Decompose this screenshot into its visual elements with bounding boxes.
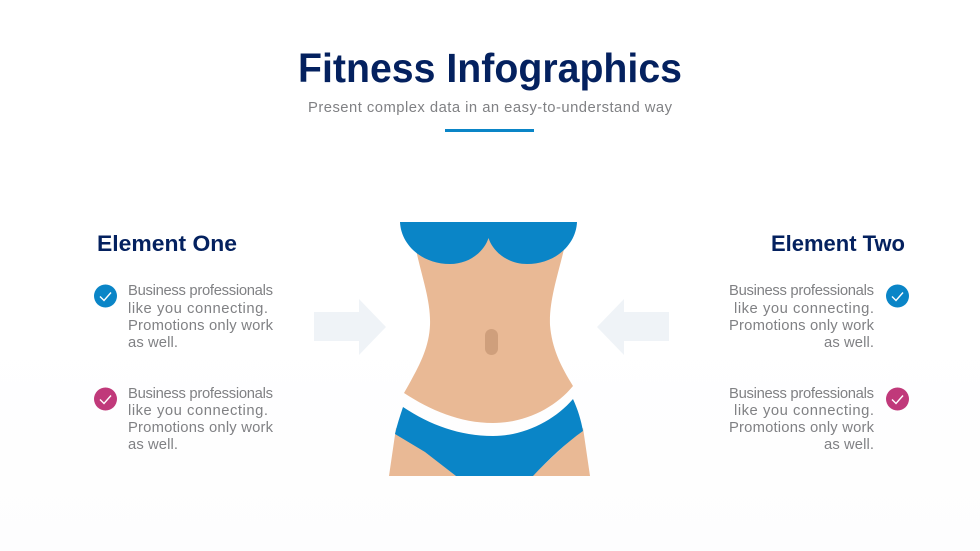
arrow: right pointing left	[597, 299, 669, 355]
text block: left two: Promotions only work	[128, 420, 274, 436]
heading: element two: Element Two	[771, 231, 905, 256]
subtitle: Present complex data in an easy-to-understand way	[308, 100, 673, 116]
navel	[485, 329, 498, 355]
bikini top	[400, 222, 577, 264]
text block: left two: like you connecting.	[128, 403, 268, 419]
text block: left one: as well.	[128, 335, 178, 351]
text block: right one: Business professionals	[729, 283, 874, 299]
arrow: left pointing right	[314, 299, 386, 355]
icon: magenta check left	[94, 388, 117, 410]
text block: right two: as well.	[824, 437, 874, 453]
text block: right one: like you connecting.	[734, 301, 874, 317]
icon: blue check right	[886, 284, 909, 308]
bikini bottom	[395, 399, 583, 476]
text block: right two	[729, 386, 875, 453]
icon: magenta check right	[886, 388, 909, 410]
text block: left one: Business professionals	[128, 283, 273, 299]
icon: blue check left	[94, 284, 117, 308]
text block: left two: Business professionals	[128, 386, 273, 402]
torso skin	[404, 230, 573, 423]
text block: right two: like you connecting.	[734, 403, 874, 419]
text block: right one: as well.	[824, 335, 874, 351]
text block: right one: Promotions only work	[729, 318, 875, 334]
right leg	[532, 428, 590, 476]
text block: left one: like you connecting.	[128, 301, 268, 317]
text block: right two: Business professionals	[729, 386, 874, 402]
text block: left one	[128, 283, 274, 351]
figure: torso	[389, 222, 590, 476]
title: Fitness Infographics	[298, 45, 682, 91]
text block: left one: Promotions only work	[128, 318, 274, 334]
title underline	[445, 129, 534, 132]
text block: right two: Promotions only work	[729, 420, 875, 436]
text block: right one	[729, 283, 875, 351]
text block: left two: as well.	[128, 437, 178, 453]
heading: element one: Element One	[97, 231, 237, 256]
text block: left two	[128, 386, 274, 453]
left leg	[389, 428, 456, 476]
